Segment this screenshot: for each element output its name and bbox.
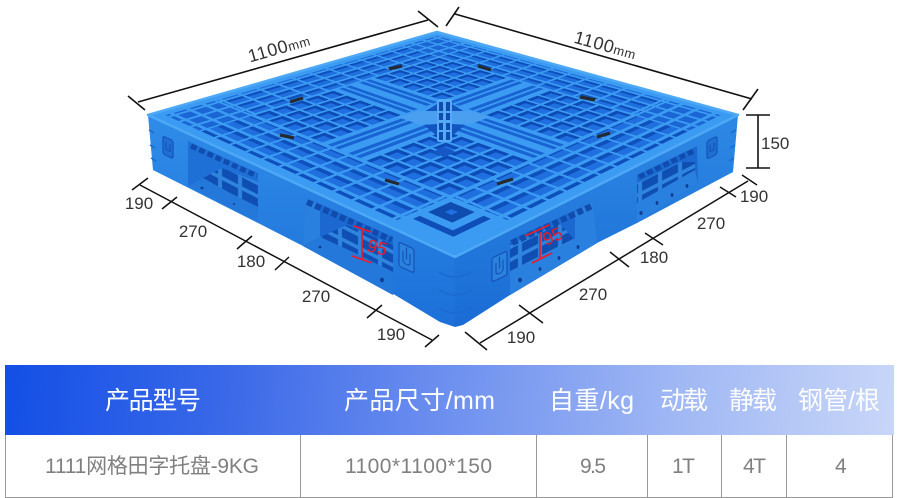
red dimension: left opening 95: 95 bbox=[365, 235, 389, 260]
table header labels: 静载 bbox=[729, 387, 777, 415]
handle emboss left back bbox=[163, 136, 173, 159]
table header labels: 钢管/根 bbox=[798, 387, 880, 415]
table data row: 1111网格田字托盘-9KG bbox=[45, 455, 259, 478]
dimension: front right segments: 180 bbox=[640, 248, 668, 267]
dimension: top right 1100mm: 1100mm bbox=[572, 27, 639, 63]
cross arms with long slots bbox=[256, 58, 631, 195]
table data row: 9.5 bbox=[580, 455, 606, 478]
table data row: 1T bbox=[672, 455, 695, 478]
dimension: front left segments: 190 bbox=[125, 194, 153, 213]
dimension: front right segments: 190 bbox=[740, 187, 768, 206]
handle emboss right back bbox=[707, 136, 717, 159]
table data row: 4 bbox=[835, 455, 847, 478]
dimension: front right segments: 270 bbox=[579, 285, 607, 304]
table data row: 1100*1100*150 bbox=[345, 455, 492, 478]
specification table bbox=[5, 365, 894, 498]
table header labels: 产品型号 bbox=[105, 387, 201, 415]
right opening 2 bbox=[637, 146, 698, 223]
deck base bbox=[148, 32, 738, 257]
corner ribs bbox=[149, 130, 736, 313]
dimension: height 150 bbox=[746, 115, 789, 168]
dimension: front right segments: 190 bbox=[507, 328, 535, 347]
table data row bbox=[45, 455, 847, 478]
right opening 1 bbox=[510, 202, 597, 295]
red dimension: right opening 95: 95 bbox=[539, 223, 566, 250]
dimension: top left 1100mm bbox=[128, 11, 438, 110]
table borders bbox=[6, 435, 892, 498]
handle emboss front right bbox=[492, 251, 507, 282]
dimension: height 150: 150 bbox=[761, 134, 789, 153]
handle emboss front left bbox=[399, 242, 414, 273]
red dimension: right opening 95 bbox=[525, 223, 566, 263]
dimension: front left segments: 270 bbox=[179, 222, 207, 241]
red dimension: left opening 95 bbox=[352, 226, 389, 263]
table header labels: 自重/kg bbox=[549, 387, 634, 415]
deck rim outline bbox=[148, 32, 738, 257]
dimension: front left segments: 270 bbox=[302, 287, 330, 306]
center hub bbox=[397, 99, 490, 157]
dimension: front right segments bbox=[465, 175, 768, 350]
dimension: front left segments bbox=[125, 178, 439, 347]
corner cells bbox=[166, 36, 721, 246]
table header labels: 产品尺寸/mm bbox=[344, 387, 495, 415]
table header labels bbox=[105, 387, 880, 415]
left opening 1 bbox=[188, 141, 258, 222]
right side face bbox=[455, 115, 738, 327]
anti-slip pads bbox=[280, 66, 610, 184]
dimension: front right segments: 270 bbox=[697, 214, 725, 233]
dimension: top left 1100mm: 1100mm bbox=[246, 29, 313, 66]
left side face bbox=[148, 115, 455, 327]
left opening 2 bbox=[303, 197, 393, 295]
dimension: front left segments: 180 bbox=[237, 252, 265, 271]
pallet top deck lattice bbox=[152, 33, 734, 256]
quadrant lattices bbox=[253, 57, 634, 196]
dimension: top right 1100mm bbox=[446, 7, 758, 110]
table data row: 4T bbox=[743, 455, 766, 478]
table header band bbox=[5, 365, 894, 435]
table header labels: 动载 bbox=[660, 387, 708, 415]
dimension: front left segments: 190 bbox=[377, 325, 405, 344]
edge bands bbox=[166, 36, 721, 246]
